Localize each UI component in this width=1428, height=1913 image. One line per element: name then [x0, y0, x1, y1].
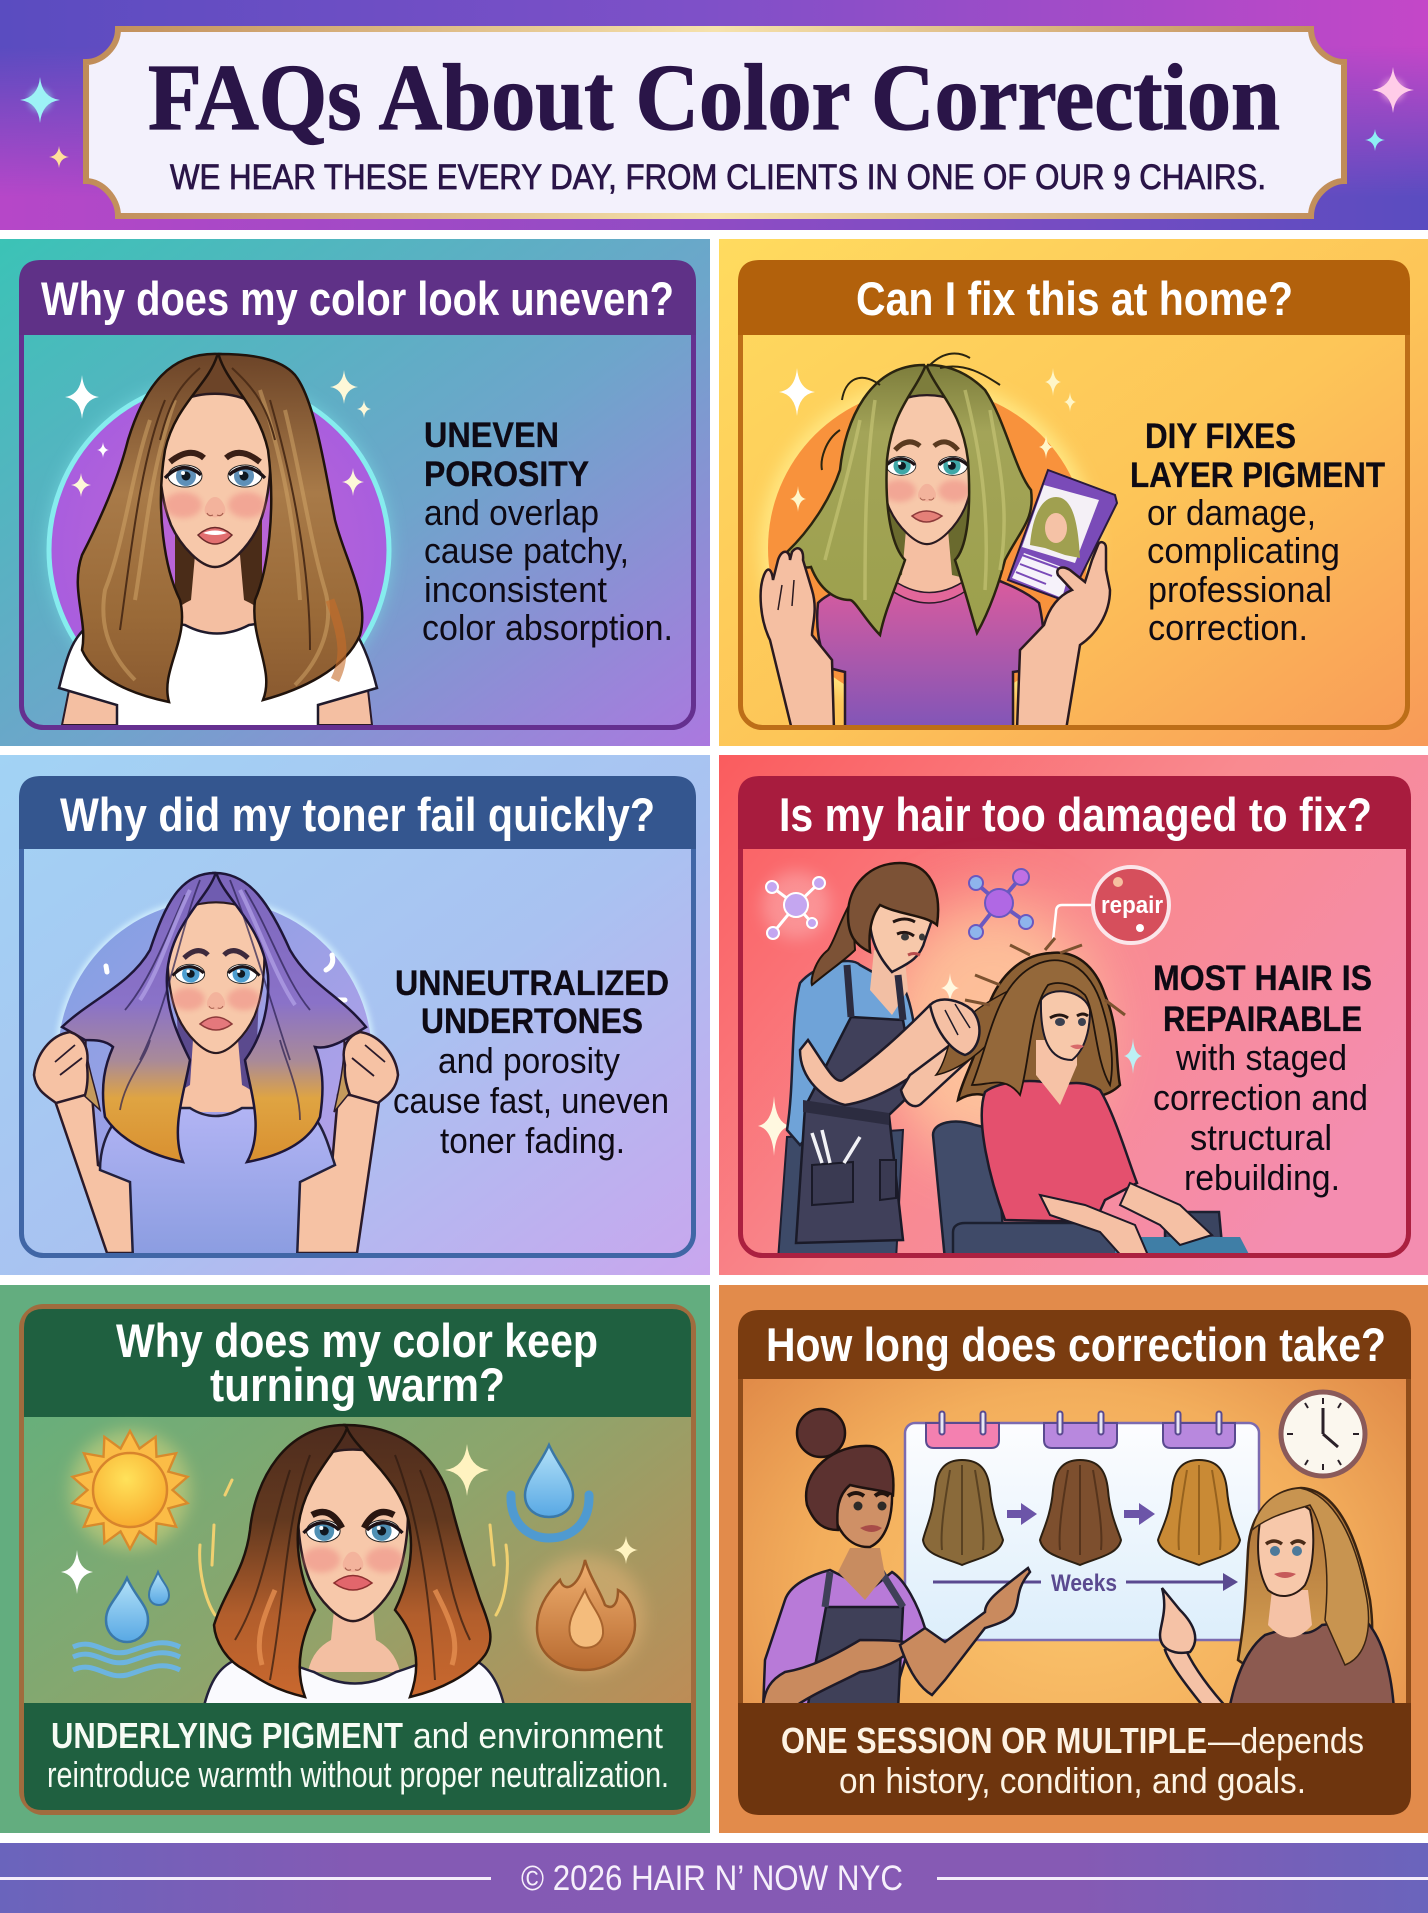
answer strip: —depends [1208, 1720, 1364, 1761]
answer text: with staged [1175, 1037, 1347, 1078]
copyright text: © 2026 HAIR N’ NOW NYC [521, 1859, 903, 1898]
answer text: REPAIRABLE [1163, 1000, 1362, 1039]
heading bar [24, 1309, 691, 1417]
answer text: and overlap [424, 492, 599, 533]
icon: flame [525, 1555, 645, 1675]
illustration: worried woman with green hair holding dye box [760, 354, 1117, 730]
answer text: POROSITY [424, 455, 589, 494]
icon: sparkle gold left [49, 146, 69, 168]
answer text: or damage, [1147, 492, 1316, 533]
icon: repair bubble [1053, 867, 1169, 943]
title: FAQs About Color Correction [148, 46, 1280, 150]
panel: color turning warm [0, 1285, 710, 1833]
answer text: LAYER PIGMENT [1130, 456, 1385, 495]
answer strip: and environment [413, 1715, 663, 1756]
panel: hair too damaged [719, 755, 1428, 1275]
footer [0, 1843, 1428, 1913]
panel: how long correction takes [719, 1285, 1428, 1833]
answer text [1153, 959, 1372, 1198]
answer text: cause fast, uneven [393, 1080, 669, 1121]
header banner [0, 0, 1428, 230]
answer strip: UNDERLYING PIGMENT [51, 1715, 403, 1756]
answer text: rebuilding. [1184, 1157, 1340, 1198]
answer text: correction. [1148, 607, 1308, 648]
client [1160, 1488, 1394, 1710]
client [958, 953, 1120, 1100]
answer strip: on history, condition, and goals. [839, 1760, 1306, 1801]
heading bar [19, 776, 696, 849]
illustration: stylist treating client hair [758, 863, 1252, 1260]
illustration: stylist showing timeline to client [763, 1392, 1394, 1710]
heading bar [738, 1310, 1411, 1379]
chair [933, 1122, 1005, 1260]
icon: sun [70, 1430, 190, 1550]
panel: why color looks uneven [0, 239, 710, 746]
answer text [422, 416, 673, 648]
answer text [1130, 417, 1385, 648]
stylist [763, 1409, 1030, 1710]
answer text: color absorption. [422, 607, 673, 648]
answer text: structural [1190, 1117, 1332, 1158]
answer text: cause patchy, [424, 530, 629, 571]
answer text [393, 964, 669, 1161]
answer text: DIY FIXES [1145, 417, 1296, 456]
question text: Why does my color keep [116, 1314, 598, 1367]
answer text: inconsistent [424, 569, 607, 610]
heading bar [738, 260, 1410, 335]
answer text: UNEVEN [424, 416, 559, 455]
illustration: woman with fading purple and gold hair [34, 873, 398, 1260]
answer strip: reintroduce warmth without proper neutralization. [47, 1754, 669, 1795]
heading bar: turning warm? [210, 1358, 505, 1411]
answer text: MOST HAIR IS [1153, 959, 1372, 998]
icon: molecule left [762, 871, 830, 939]
illustration: frustrated woman with brown hair [47, 354, 391, 730]
calendar board [905, 1414, 1259, 1640]
answer text: professional [1148, 569, 1332, 610]
arrow: between swatches [1007, 1503, 1155, 1525]
answer strip [738, 1703, 1411, 1815]
icon: hair swatch 3 [1158, 1460, 1240, 1565]
panel: fix at home [719, 239, 1428, 746]
answer strip [24, 1703, 691, 1810]
icon: drops and waves [73, 1572, 180, 1676]
answer text: complicating [1147, 530, 1340, 571]
title plaque [86, 29, 1344, 216]
answer text: UNDERTONES [421, 1002, 643, 1041]
timeline arrow with weeks: Weeks [1051, 1570, 1117, 1597]
heading bar [19, 260, 696, 335]
icon: hair swatch 2 [1040, 1460, 1121, 1565]
icon: water drop with arc [511, 1445, 589, 1538]
icon: repair bubble: repair [1101, 892, 1163, 919]
answer text: toner fading. [440, 1120, 625, 1161]
illustration: warm hair and environment icons [61, 1425, 645, 1710]
question text: Why does my color look uneven? [41, 272, 674, 325]
icon: sparkle cyan right [1365, 129, 1385, 151]
answer text: and porosity [438, 1040, 620, 1081]
icon: sparkle pink right [1372, 67, 1414, 113]
timeline arrow with weeks [933, 1573, 1238, 1591]
subtitle: WE HEAR THESE EVERY DAY, FROM CLIENTS IN ONE OF OUR 9 CHAIRS. [170, 158, 1266, 197]
answer strip: ONE SESSION OR MULTIPLE [781, 1720, 1207, 1761]
question text: Can I fix this at home? [856, 272, 1293, 325]
icon: wall clock [1281, 1392, 1365, 1476]
answer text: UNNEUTRALIZED [395, 964, 669, 1003]
icon: sparkle cyan left [20, 77, 60, 123]
icon: hair swatch 1 [923, 1460, 1003, 1565]
panel: toner fail [0, 755, 710, 1275]
icon: molecule right [969, 869, 1033, 939]
question text: Why did my toner fail quickly? [60, 788, 655, 841]
answer text: correction and [1153, 1077, 1368, 1118]
heading bar [738, 776, 1411, 849]
